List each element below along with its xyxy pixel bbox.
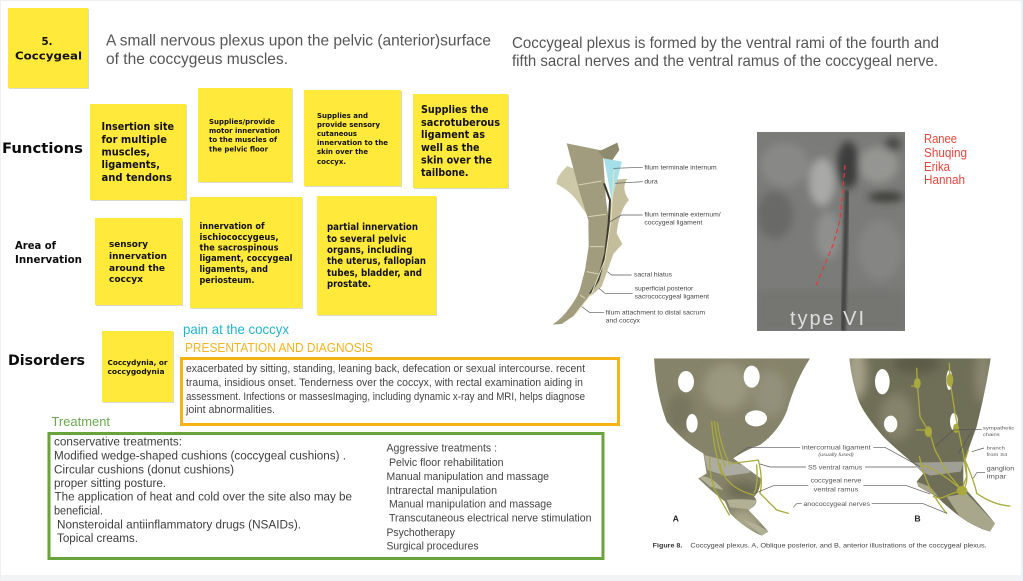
sticky note: ischiococcygeus innervation: periosteum.	[200, 276, 254, 286]
sticky note: ischiococcygeus innervation: ischiococcygeus,	[200, 233, 278, 243]
callout labels	[802, 425, 1015, 508]
names: team members: Erika	[924, 160, 950, 174]
heading: Functions: Functions	[2, 141, 83, 157]
description: how the plexus is formed: fifth sacral nerves and the ventral ramus of the coccygeal nerve.	[512, 53, 938, 70]
callout labels: anococcygeal nerves	[803, 501, 870, 508]
sticky note: sensory cutaneous innervation: coccyx.	[317, 158, 346, 166]
diagram: sagittal sacrum and filum terminale: superficial posterior	[635, 286, 693, 293]
description: small nervous plexus: A small nervous plexus upon the pelvic (anterior)surface	[106, 32, 491, 50]
sticky note: 5. Coccygeal	[8, 8, 89, 89]
panel: presentation and diagnosis text box: exacerbated by sitting, standing, leaning back, defecation or sexual intercourse. recent	[186, 363, 586, 375]
description: how the plexus is formed: Coccygeal plexus is formed by the ventral rami of the fourth and	[512, 35, 939, 52]
sticky note: sensory innervation: sensory	[109, 240, 148, 250]
sticky note: sensory innervation	[95, 218, 183, 306]
sticky note: sensory innervation: around the	[109, 264, 165, 274]
sticky note: insertion site: Insertion site	[102, 121, 174, 133]
heading: Area of Innervation	[15, 240, 82, 266]
diagram: sagittal sacrum and filum terminale: filum attachment to distal sacrum	[606, 309, 705, 316]
sticky note: insertion site: muscles,	[102, 146, 150, 158]
sticky note: insertion site: ligaments,	[102, 159, 160, 171]
sticky note: sacrotuberous ligament: tailbone.	[421, 167, 468, 179]
aggressive treatments list	[386, 443, 592, 552]
sticky note: sensory cutaneous innervation	[304, 90, 402, 187]
figure caption: Figure 8.	[653, 543, 683, 549]
sticky note: partial innervation	[317, 196, 437, 316]
panel: presentation and diagnosis text box: assessment. Infections or massesImaging, including dynamic x-ray and MRI, helps diagnose	[186, 391, 585, 403]
sticky note: partial innervation: partial innervation	[327, 222, 418, 233]
diagram: sagittal sacrum and filum terminale: dura	[644, 178, 658, 185]
sticky note: sensory cutaneous innervation: innervation to the	[317, 139, 388, 147]
diagram: sagittal sacrum and filum terminale: filum terminale externum/	[644, 212, 721, 219]
conservative treatments list: conservative treatments:	[54, 435, 182, 449]
x-ray image: type VI	[757, 132, 905, 331]
conservative treatments list: The application of heat and cold over the site also may be	[54, 490, 352, 504]
callout labels: sympathetic	[983, 425, 1015, 430]
sticky note: sensory innervation: innervation	[109, 252, 167, 262]
sticky note: sensory cutaneous innervation: Supplies and	[317, 112, 368, 120]
sticky note: partial innervation: the uterus, fallopian	[327, 256, 426, 267]
diagram: sagittal sacrum and filum terminale: sacrococcygeal ligament	[635, 294, 709, 301]
sticky note: sacrotuberous ligament: well as the	[421, 142, 480, 154]
aggressive treatments list: Intrarectal manipulation	[386, 485, 497, 497]
sticky note: sacrotuberous ligament: ligament as	[421, 129, 485, 141]
conservative treatments list: beneficial.	[54, 503, 103, 517]
aggressive treatments list: Manual manipulation and massage	[386, 471, 549, 483]
callout labels: impar	[987, 474, 1006, 481]
conservative treatments list: Topical creams.	[57, 531, 138, 545]
callout labels: intercornual ligament	[802, 444, 871, 451]
aggressive treatments list: Manual manipulation and massage	[389, 499, 552, 511]
sticky note: sacrotuberous ligament	[413, 94, 509, 189]
sticky note: partial innervation: to several pelvic	[327, 234, 406, 245]
names: team members: Hannah	[924, 173, 965, 187]
leader lines	[737, 429, 985, 513]
conservative treatments list: proper sitting posture.	[54, 476, 166, 490]
sticky note: motor innervation	[198, 88, 293, 183]
aggressive treatments list: Psychotherapy	[386, 527, 455, 539]
diagram: sagittal sacrum and filum terminale: filum terminale internum	[644, 164, 717, 171]
sticky note: sensory cutaneous innervation: skin over the	[317, 148, 368, 156]
sticky note: insertion site: and tendons	[102, 172, 172, 184]
conservative treatments list: Modified wedge-shaped cushions (coccygeal cushions) .	[54, 448, 346, 462]
sticky note: coccydynia: Coccydynia, or	[108, 359, 168, 367]
names: team members: Ranee	[924, 132, 957, 146]
callout labels: from S4	[987, 452, 1008, 458]
diagram: sagittal sacrum and filum terminale: sacral hiatus	[634, 272, 672, 279]
description: how the plexus is formed	[512, 35, 939, 70]
sticky note: partial innervation: organs, including	[327, 245, 412, 256]
callout labels: S5 ventral ramus	[808, 464, 862, 471]
description: small nervous plexus: of the coccygeus muscles.	[106, 51, 288, 68]
illustration A: oblique posterior: A	[673, 514, 680, 524]
heading: Treatment: Treatment	[52, 415, 111, 429]
sticky note: coccydynia	[102, 331, 174, 403]
sticky note: motor innervation: motor innervation	[209, 127, 280, 135]
sticky note: partial innervation: prostate.	[327, 279, 371, 290]
sticky note: motor innervation: Supplies/provide	[209, 118, 275, 126]
sticky note: sensory cutaneous innervation: cutaneous	[317, 130, 357, 138]
sticky note: insertion site: for multiple	[102, 134, 167, 146]
names: team members: Shuqing	[924, 146, 967, 160]
illustration B: anterior	[847, 347, 1010, 537]
conservative treatments list: Circular cushions (donut cushions)	[54, 462, 234, 476]
figure caption: Coccygeal plexus. A, Oblique posterior, and B, anterior illustrations of the coccygeal plexus.	[690, 543, 987, 549]
sticky note: partial innervation: tubes, bladder, and	[327, 268, 422, 279]
sticky note: ischiococcygeus innervation: ligament, coccygeal	[200, 254, 292, 264]
sticky note: 5. Coccygeal: Coccygeal	[15, 50, 82, 62]
diagram: sagittal sacrum and filum terminale	[553, 143, 721, 325]
aggressive treatments list: Pelvic floor rehabilitation	[389, 457, 504, 469]
label: pain at the coccyx: pain at the coccyx	[183, 321, 289, 337]
diagram: sagittal sacrum and filum terminale: coccygeal ligament	[644, 220, 703, 227]
sticky note: ischiococcygeus innervation	[190, 197, 303, 309]
x-ray image: type VI: type VI	[790, 308, 864, 330]
aggressive treatments list: Transcutaneous electrical nerve stimulation	[389, 513, 592, 525]
sticky note: sacrotuberous ligament: skin over the	[421, 154, 492, 166]
callout labels: ventral ramus	[814, 486, 858, 493]
panel: treatment box	[49, 434, 603, 558]
aggressive treatments list: Aggressive treatments :	[386, 443, 497, 455]
conservative treatments list	[54, 435, 352, 545]
sticky note: coccydynia: coccygodynia	[108, 368, 165, 376]
sticky note: sacrotuberous ligament: Supplies the	[421, 104, 488, 116]
conservative treatments list: Nonsteroidal antiinflammatory drugs (NSAIDs).	[57, 517, 301, 531]
callout labels: branch	[987, 445, 1005, 451]
callout labels: coccygeal nerve	[811, 478, 862, 485]
panel: presentation and diagnosis text box	[182, 358, 618, 424]
callout labels: chains	[983, 432, 1000, 437]
heading: Disorders: Disorders	[8, 353, 85, 369]
aggressive treatments list: Surgical procedures	[386, 540, 479, 552]
illustration A: oblique posterior	[650, 357, 817, 540]
illustration B: anterior: B	[914, 514, 921, 524]
sticky note: motor innervation: the pelvic floor	[209, 146, 269, 154]
sticky note: 5. Coccygeal: 5.	[42, 36, 52, 48]
sticky note: ischiococcygeus innervation: ligaments, and	[200, 265, 268, 275]
sticky note: insertion site	[90, 104, 187, 201]
panel: presentation and diagnosis text box: joint abnormalities.	[185, 404, 275, 416]
sticky note: sensory innervation: coccyx	[109, 275, 143, 285]
sticky note: sensory cutaneous innervation: provide sensory	[317, 121, 380, 129]
heading: Area of Innervation: Innervation	[15, 254, 82, 266]
sticky note: ischiococcygeus innervation: innervation of	[200, 222, 265, 232]
diagram: sagittal sacrum and filum terminale: and coccyx	[606, 318, 641, 325]
heading: presentation and diagnosis: PRESENTATION AND DIAGNOSIS	[185, 341, 373, 355]
sticky note: ischiococcygeus innervation: the sacrospinous	[200, 244, 278, 254]
heading: Area of Innervation: Area of	[15, 240, 56, 252]
names: team members	[924, 132, 967, 187]
sticky note: sacrotuberous ligament: sacrotuberous	[421, 117, 500, 129]
panel: presentation and diagnosis text box: trauma, insidious onset. Tenderness over the coccyx, with rectal examination aiding in	[186, 377, 583, 389]
diagram: coccygeal plexus figure	[650, 347, 1015, 549]
callout labels: ganglion	[987, 466, 1015, 473]
callout labels: (usually fused)	[818, 452, 854, 457]
description: small nervous plexus	[106, 32, 491, 68]
sticky note: motor innervation: to the muscles of	[209, 136, 278, 144]
